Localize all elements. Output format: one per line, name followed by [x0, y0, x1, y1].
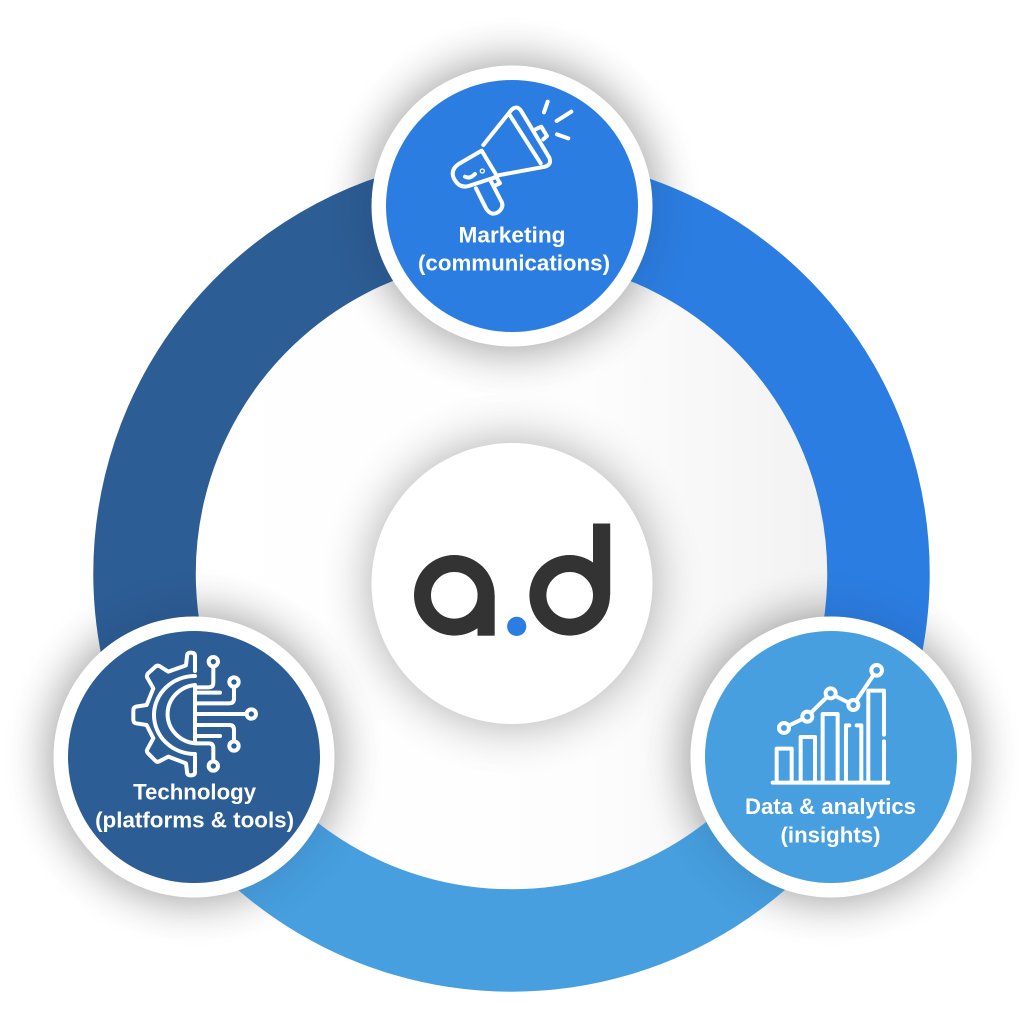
panel: center logo [369, 440, 655, 726]
ring segment: data and analytics [194, 757, 829, 940]
inner disc background [192, 254, 832, 894]
logo: a.d [422, 524, 610, 636]
icon: megaphone [453, 102, 571, 214]
panel: marketing [372, 66, 652, 346]
icon: bar chart with trend line [773, 665, 888, 783]
ring segment: technology [145, 206, 511, 757]
panel: data and analytics [690, 616, 972, 898]
label: marketing: Marketing [458, 223, 566, 248]
label: technology: Technology [133, 780, 257, 804]
label: communications: (communications) [418, 251, 610, 276]
label: insights: (insights) [780, 822, 880, 847]
label: data and analytics: Data & analytics [745, 794, 916, 819]
ring: three coloured segments [145, 206, 878, 940]
ring segment: marketing [512, 206, 878, 757]
label: platforms and tools: (platforms & tools) [95, 808, 294, 833]
icon: gear with circuit traces [133, 653, 256, 775]
panel: technology [54, 616, 334, 898]
